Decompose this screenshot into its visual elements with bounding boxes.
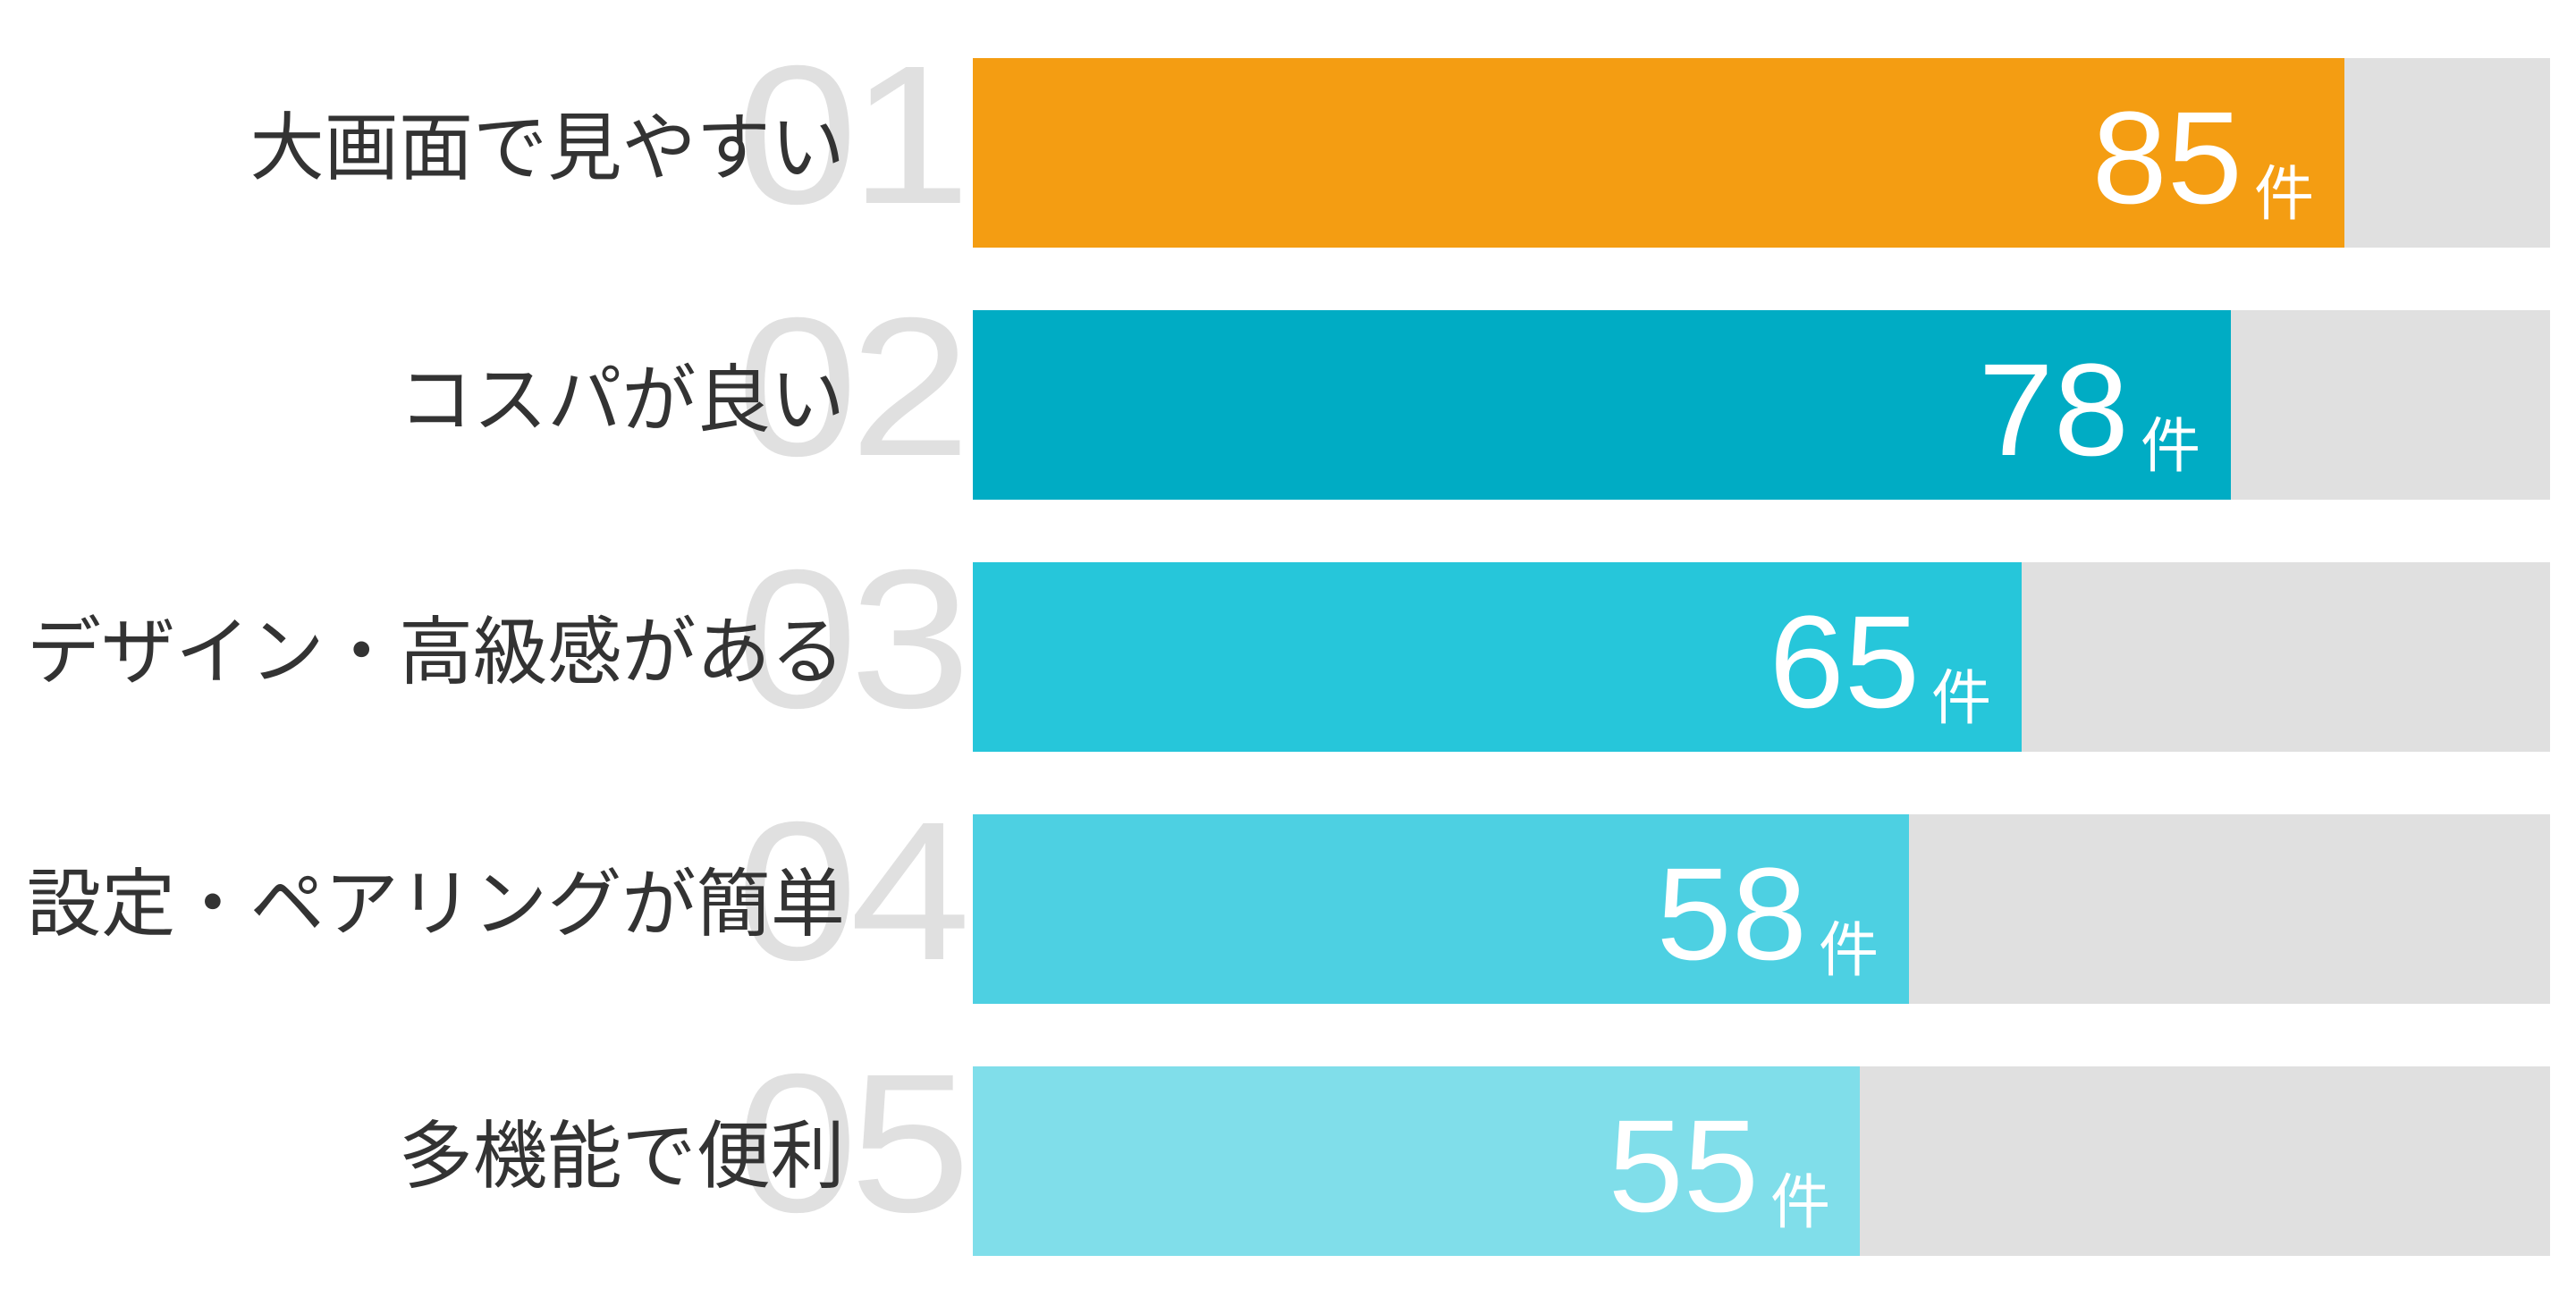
row 1: 大画面で見やすい — [249, 25, 2550, 248]
value 85: 85 — [2092, 84, 2242, 232]
rank number 03: 03 — [737, 529, 963, 750]
track — [973, 1066, 2550, 1256]
unit: 件 — [1931, 665, 1991, 732]
track — [973, 814, 2550, 1004]
unit: 件 — [2141, 413, 2200, 480]
unit: 件 — [1819, 917, 1879, 984]
value 65: 65 — [1769, 588, 1920, 736]
value 78: 78 — [1979, 336, 2129, 484]
label: デザイン・高級感がある — [27, 611, 845, 694]
row 4: 設定・ペアリングが簡単 — [27, 781, 2550, 1004]
value bar — [973, 1066, 1860, 1256]
track — [973, 310, 2550, 500]
value bar — [973, 58, 2344, 248]
unit: 件 — [2254, 161, 2314, 228]
label: コスパが良い — [399, 358, 845, 442]
value 55: 55 — [1609, 1092, 1759, 1240]
row 2: コスパが良い — [399, 277, 2550, 500]
rank number 01: 01 — [737, 25, 963, 246]
row 3: デザイン・高級感がある — [27, 529, 2550, 752]
value bar — [973, 562, 2022, 752]
rank number 02: 02 — [737, 277, 963, 498]
value 58: 58 — [1657, 840, 1807, 988]
value bar — [973, 310, 2231, 500]
value bar — [973, 814, 1909, 1004]
track — [973, 562, 2550, 752]
row 5: 多機能で便利 — [399, 1033, 2550, 1256]
label: 設定・ペアリングが簡単 — [27, 863, 845, 946]
rank number 04: 04 — [737, 781, 965, 1002]
label: 多機能で便利 — [399, 1115, 845, 1198]
label: 大画面で見やすい — [249, 106, 845, 190]
rank number 05: 05 — [737, 1033, 963, 1254]
unit: 件 — [1770, 1169, 1830, 1236]
track — [973, 58, 2550, 248]
